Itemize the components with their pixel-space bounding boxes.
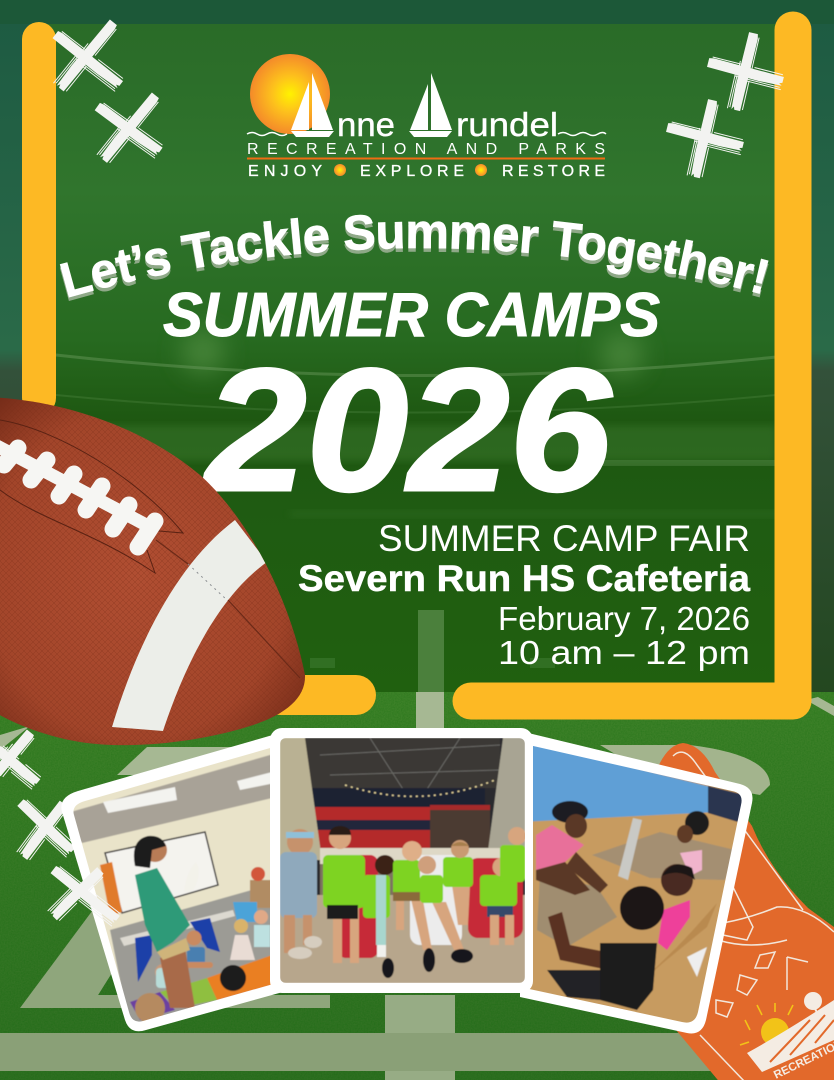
logo sailboat right [409, 73, 452, 137]
event date: February 7, 2026 [498, 600, 750, 637]
goalpost right and crossbar [471, 30, 793, 701]
heading: curved slogan: Let’s Tackle Summer Together! [60, 214, 768, 301]
child in black [547, 886, 664, 1010]
field markings [0, 692, 834, 1080]
logo motto: EXPLORE [360, 163, 464, 180]
rug [207, 955, 272, 1000]
camper C [393, 841, 435, 972]
icon: foam finger [650, 743, 834, 1080]
logo motto: RESTORE [502, 163, 605, 180]
logo motto: ENJOY [248, 163, 322, 180]
camper D [418, 856, 473, 963]
logo sun [250, 54, 330, 134]
teacher [134, 836, 195, 1008]
goalpost left [22, 39, 56, 398]
side walls [280, 738, 322, 860]
camper B [363, 855, 395, 978]
chairs [338, 855, 378, 958]
photo: classroom with bird [62, 736, 280, 1032]
child in pink [536, 801, 608, 895]
camper E [443, 840, 473, 925]
panel: green scoreboard field [30, 24, 800, 694]
fence [320, 848, 510, 864]
camper A [323, 826, 365, 963]
icon: football [0, 395, 318, 755]
football stripe [112, 520, 267, 731]
logo name: rundel [456, 106, 558, 143]
event name: SUMMER CAMP FAIR [378, 518, 750, 559]
whiteboard [105, 832, 218, 913]
hanging red wall [315, 807, 430, 848]
logo [247, 54, 606, 180]
table tops [536, 881, 617, 946]
logo sailboat left [291, 73, 334, 137]
photo frame [61, 730, 290, 1031]
photo: craft table [520, 731, 760, 1033]
bird [184, 862, 199, 892]
brush marks: top left [50, 17, 164, 164]
child in light pink [677, 811, 709, 876]
football laces [0, 445, 155, 547]
event details [298, 518, 750, 671]
finger logo: sun [761, 1018, 789, 1046]
heading: summer camps: SUMMER CAMPS [163, 281, 660, 350]
event location: Severn Run HS Cafeteria [298, 558, 750, 599]
camper G [500, 827, 526, 882]
logo motto [248, 163, 605, 180]
string lights [345, 780, 495, 796]
brush mark: over classroom photo [47, 864, 121, 927]
camper F [480, 858, 517, 945]
sand ground [280, 895, 525, 983]
photo frame [520, 731, 752, 1033]
logo name [337, 106, 558, 143]
counselor [280, 829, 322, 959]
logo name: nne [337, 106, 395, 143]
logo subtitle: RECREATION AND PARKS [247, 141, 605, 158]
finger logo: hills [747, 992, 834, 1072]
event time: 10 am – 12 pm [498, 634, 750, 671]
goalpost left crossbar [280, 675, 356, 715]
photo: campers group [270, 728, 533, 993]
grass field [0, 692, 834, 1080]
brush marks: top right [665, 31, 784, 179]
brush marks: lower left [0, 727, 77, 861]
photo frame [270, 728, 533, 993]
child in bright pink [658, 864, 695, 950]
paper tube [618, 818, 642, 880]
year 2026: 2026 [202, 332, 612, 527]
stadium background [0, 0, 834, 700]
seated children [186, 930, 202, 946]
classroom shelf and chairs [250, 880, 272, 908]
